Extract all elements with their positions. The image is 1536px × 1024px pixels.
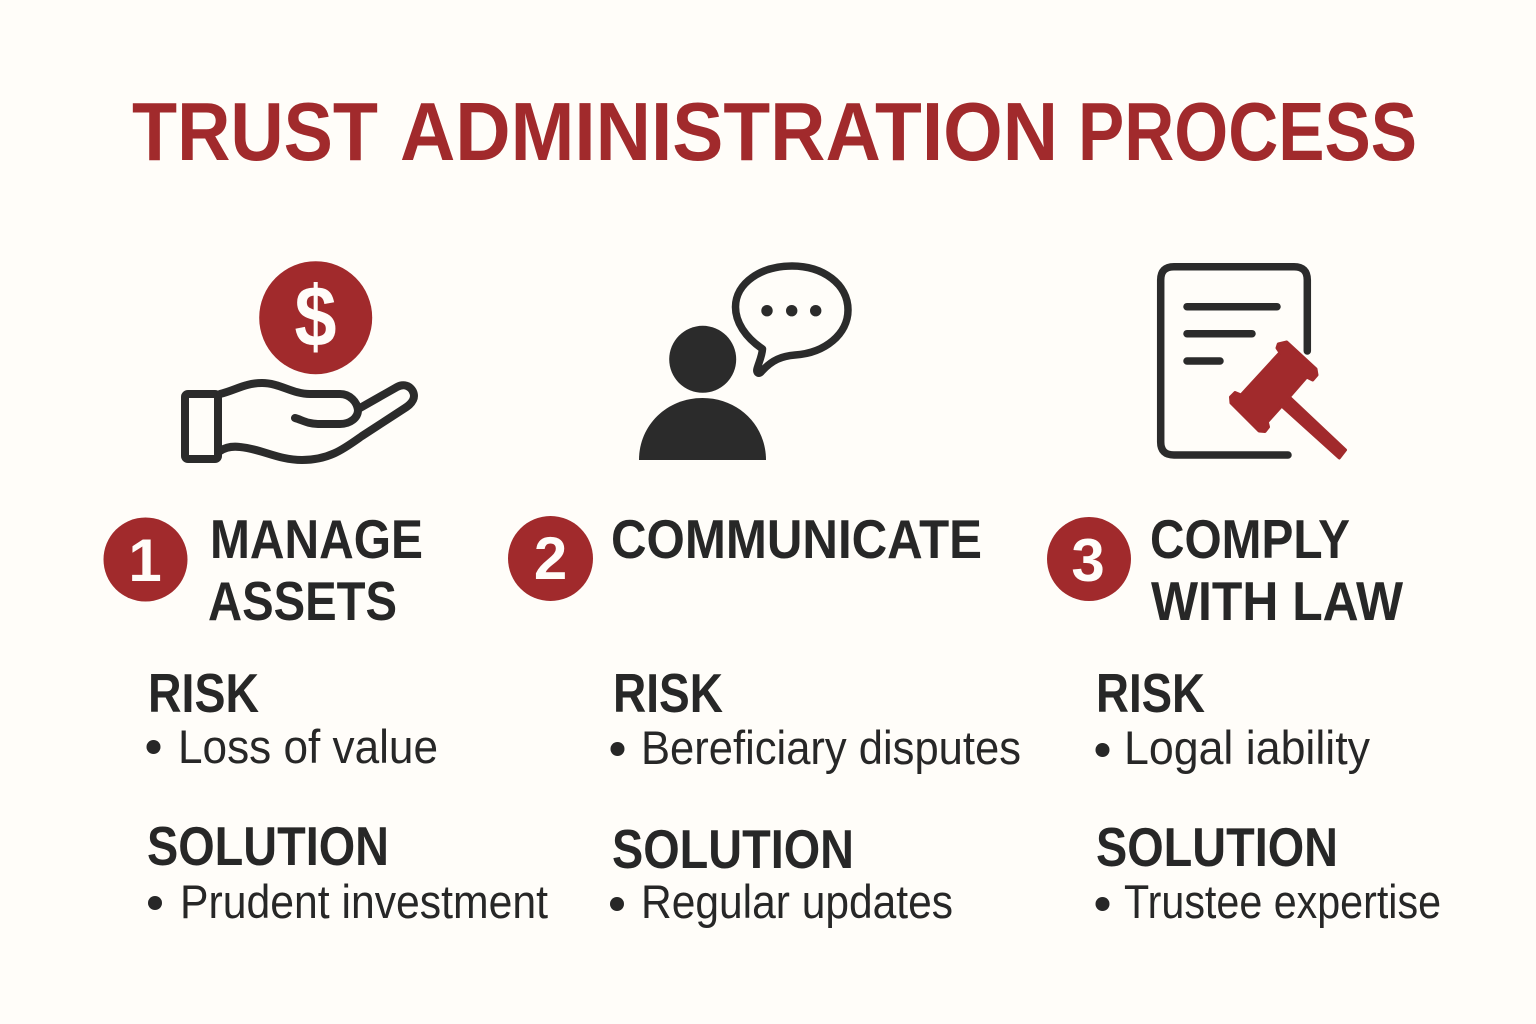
solution block: SOLUTION	[147, 815, 389, 877]
risk block	[146, 662, 438, 773]
heading: manage assets: MANAGE	[210, 508, 423, 570]
number badge 2: 2	[534, 525, 567, 592]
title: PROCESS	[1078, 85, 1417, 178]
number badge 3: 3	[1071, 527, 1105, 594]
solution block: Prudent investment	[180, 875, 548, 928]
solution block: Trustee expertise	[1124, 875, 1441, 928]
title: ADMINISTRATION	[400, 85, 1058, 178]
icon: document with gavel	[1161, 267, 1346, 458]
icon: person with speech bubble	[639, 266, 848, 460]
solution block	[1096, 816, 1441, 928]
solution block	[610, 818, 953, 928]
number badge 1	[104, 518, 188, 602]
risk block: RISK	[1096, 662, 1205, 724]
risk block: Bereficiary disputes	[641, 721, 1021, 774]
risk block	[1096, 662, 1370, 774]
heading: manage assets: ASSETS	[208, 570, 397, 632]
title: TRUST	[132, 85, 378, 178]
number badge 1: 1	[128, 527, 162, 594]
risk block	[610, 662, 1021, 774]
risk block: RISK	[148, 662, 259, 724]
panel: comply with law	[1047, 267, 1441, 928]
solution block: Regular updates	[641, 875, 953, 928]
icon: hand holding dollar coin	[185, 261, 414, 460]
number badge 3	[1047, 517, 1131, 601]
panel: manage assets	[104, 261, 548, 928]
icon: hand holding dollar coin: $	[294, 269, 336, 365]
heading: communicate: COMMUNICATE	[611, 508, 982, 570]
number badge 2	[508, 516, 593, 601]
solution block: SOLUTION	[1096, 816, 1338, 878]
risk block: Logal iability	[1124, 721, 1370, 774]
heading: comply with law	[1150, 508, 1403, 632]
panel: communicate	[508, 266, 1021, 928]
solution block: SOLUTION	[612, 818, 854, 880]
solution block	[147, 815, 548, 928]
title	[132, 85, 1417, 178]
heading: manage assets	[208, 508, 423, 632]
heading: comply with law: COMPLY	[1150, 508, 1350, 570]
risk block: Loss of value	[178, 720, 438, 773]
heading: comply with law: WITH LAW	[1151, 570, 1403, 632]
risk block: RISK	[613, 662, 723, 724]
